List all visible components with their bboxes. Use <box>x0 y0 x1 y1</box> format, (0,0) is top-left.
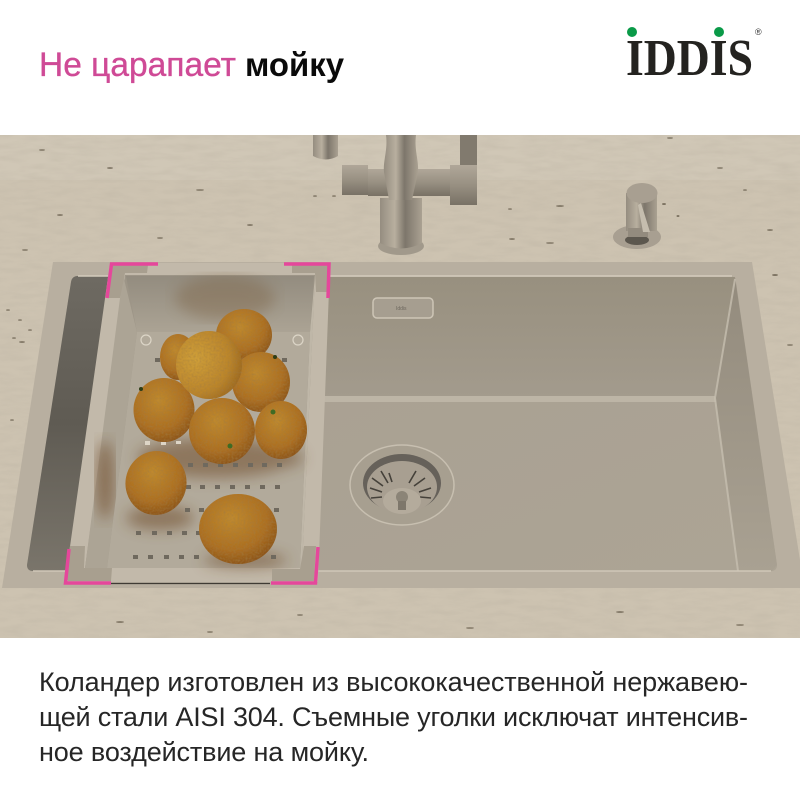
sink: steel rim <box>2 262 800 588</box>
title: мойку <box>245 46 345 83</box>
fruit shadows <box>126 438 303 568</box>
description text: ное воздействие на мойку. <box>39 737 369 767</box>
description text: щей стали AISI 304. Съемные уголки исключат интенсив- <box>39 702 748 732</box>
counter: stone worktop <box>0 135 800 638</box>
title: Не царапает <box>39 46 236 84</box>
photo: sink with colander <box>0 135 800 638</box>
sink: basin <box>27 276 777 571</box>
colander: pink corner markers <box>66 264 329 583</box>
oranges <box>120 309 307 564</box>
colander <box>65 263 330 584</box>
colander: removable corners <box>66 265 329 581</box>
description text <box>39 667 748 767</box>
soap dispenser <box>613 183 661 249</box>
tray holes <box>133 358 287 559</box>
colander: inner walls <box>85 275 315 568</box>
description text: Коландер изготовлен из высококачественной нержавею- <box>39 667 748 697</box>
drain strainer <box>350 445 454 525</box>
overflow plate <box>373 298 433 318</box>
colander: perforated tray <box>107 332 310 568</box>
title <box>39 46 345 84</box>
faucet <box>313 135 477 255</box>
colander: frame <box>65 263 330 582</box>
overflow plate: Iddis <box>396 306 407 312</box>
logo: IDDIS: ® <box>755 27 762 37</box>
